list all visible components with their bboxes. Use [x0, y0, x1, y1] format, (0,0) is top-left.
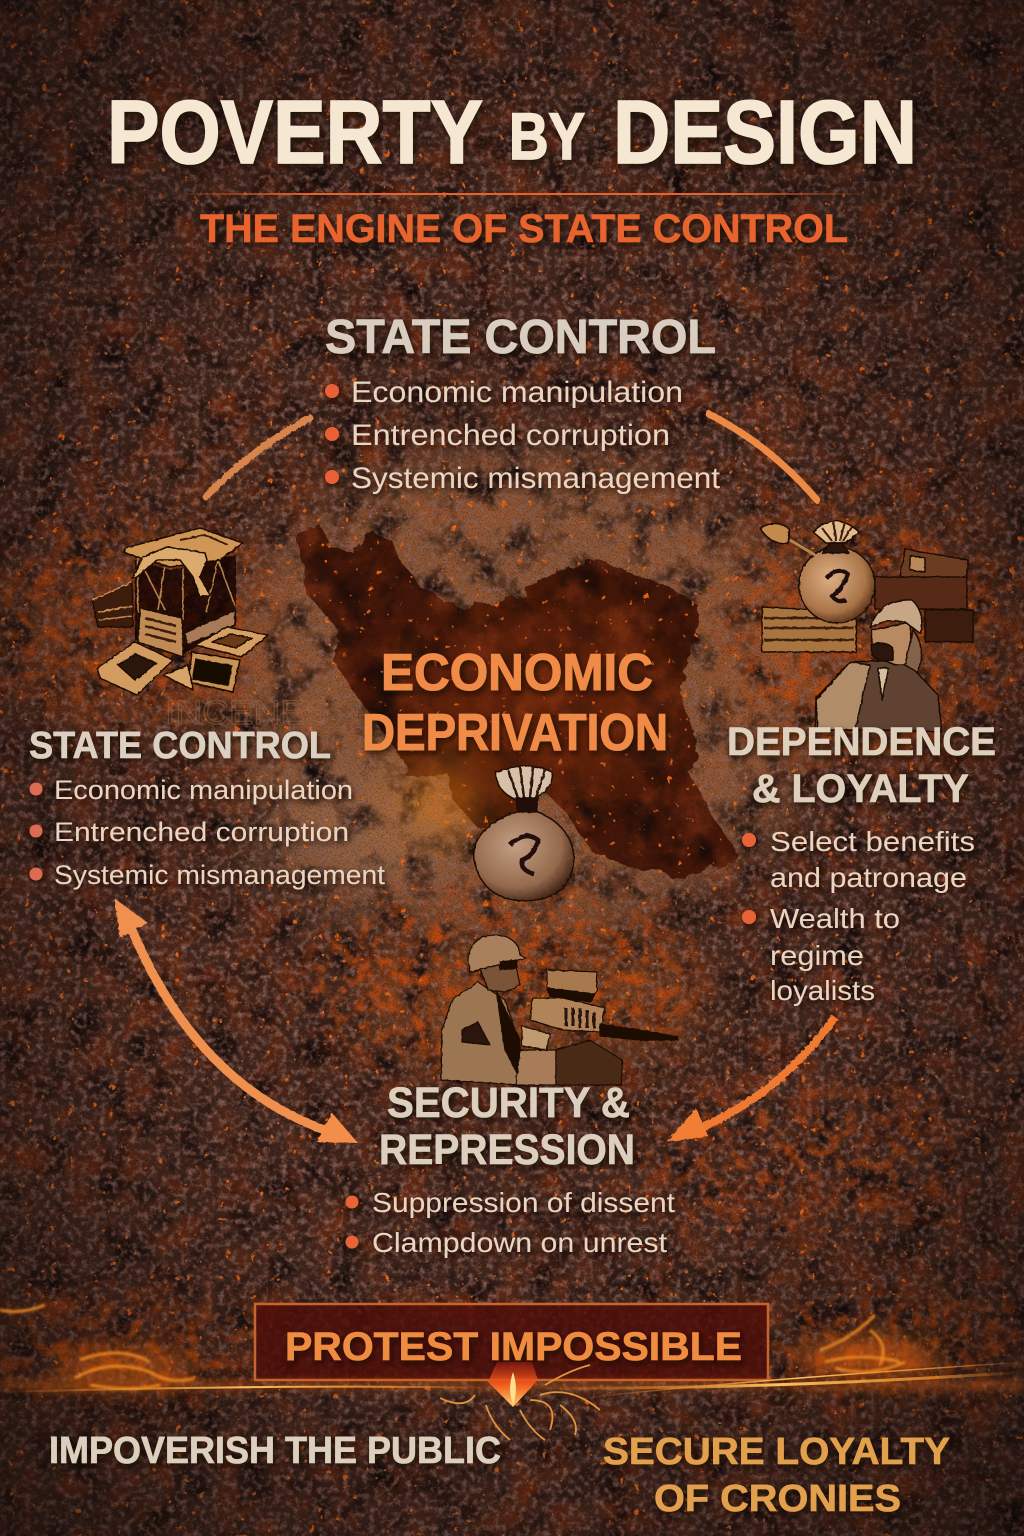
panel: state control (top): Economic manipulation [351, 376, 683, 409]
arrow: top right [709, 414, 817, 500]
panel: dependence and loyalty: & LOYALTY [752, 767, 969, 811]
heading: economic deprivation [362, 644, 668, 762]
title: POVERTY [107, 83, 483, 183]
subtitle: THE ENGINE OF STATE CONTROL [200, 207, 848, 251]
panel: dependence and loyalty [727, 720, 996, 1006]
panel: security and repression: Suppression of dissent [372, 1187, 675, 1218]
panel: state control (left): STATE CONTROL [29, 725, 331, 767]
footer: impoverish the public: IMPOVERISH THE PUBLIC [49, 1430, 501, 1472]
panel: dependence and loyalty: regime [770, 940, 864, 971]
panel: security and repression: Clampdown on unrest [372, 1227, 667, 1258]
panel: state control (top): STATE CONTROL [325, 311, 716, 364]
icon: scales, books and hand [92, 528, 268, 695]
icon: soldier with crates and rifle [441, 935, 678, 1085]
title [107, 83, 917, 183]
panel: security and repression: SECURITY & [387, 1079, 630, 1127]
title: DESIGN [613, 83, 917, 183]
heading: economic deprivation: DEPRIVATION [362, 704, 668, 762]
panel: dependence and loyalty: Select benefits [770, 826, 975, 857]
heading: economic deprivation: ECONOMIC [381, 644, 653, 702]
banner: protest impossible: PROTEST IMPOSSIBLE [285, 1325, 742, 1369]
icon: central money bag [474, 766, 574, 901]
panel: dependence and loyalty: and patronage [770, 862, 967, 893]
arrow: bottom right [667, 1017, 835, 1142]
panel: security and repression: REPRESSION [379, 1126, 635, 1174]
fire crack under banner [0, 1305, 1024, 1440]
footer: secure loyalty of cronies: OF CRONIES [654, 1478, 901, 1520]
panel: dependence and loyalty: loyalists [770, 975, 875, 1006]
arrow: bottom left double-headed [114, 898, 358, 1143]
footer: secure loyalty of cronies [603, 1431, 950, 1520]
map of Iran: dark central silhouette [296, 524, 739, 880]
panel: state control (left): Systemic mismanagement [54, 860, 386, 890]
banner: protest impossible [255, 1304, 768, 1380]
panel: state control (top): Systemic mismanagement [351, 462, 721, 495]
footer: secure loyalty of cronies: SECURE LOYALTY [603, 1431, 950, 1473]
title: BY [509, 99, 585, 173]
ghost lettering behind heading: INCENES [165, 694, 330, 732]
panel: state control (left): Economic manipulation [54, 775, 353, 805]
icon: money bag, ledgers and crony figure [760, 520, 973, 732]
arrow: top left [206, 418, 310, 497]
panel: state control (top): Entrenched corruption [351, 419, 670, 452]
panel: state control (left) [29, 725, 386, 890]
panel: state control (top) [325, 311, 721, 495]
panel: security and repression [346, 1079, 675, 1258]
panel: dependence and loyalty: Wealth to [770, 903, 900, 934]
panel: dependence and loyalty: DEPENDENCE [727, 720, 996, 764]
panel: state control (left): Entrenched corruption [54, 817, 349, 847]
